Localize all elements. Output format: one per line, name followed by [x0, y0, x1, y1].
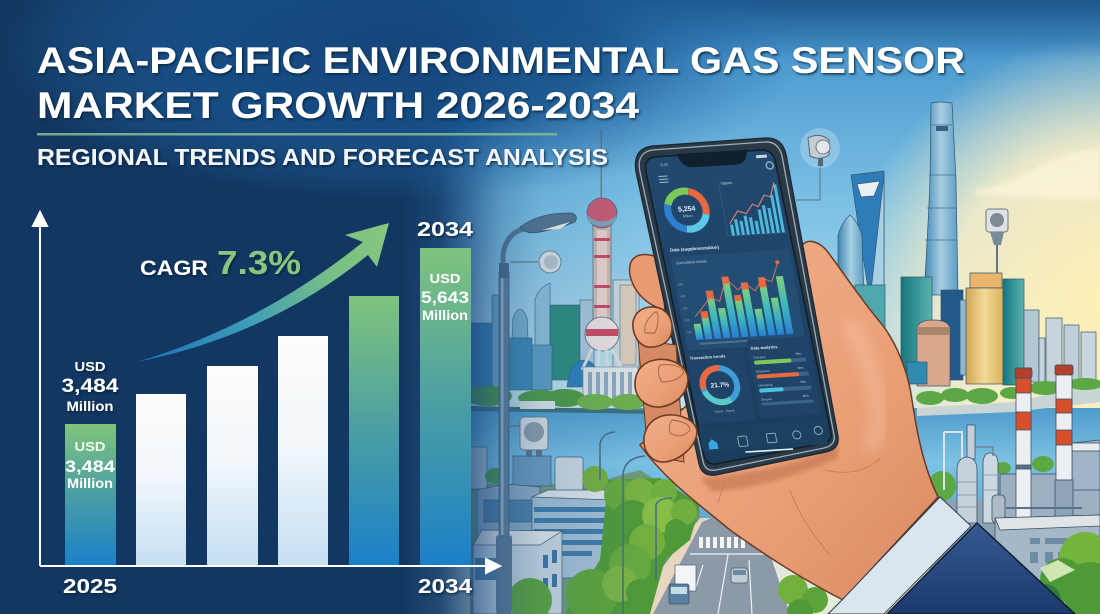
bottom-right panel: bars: Data analytics	[750, 344, 779, 351]
subtitle: REGIONAL TRENDS AND FORECAST ANALYSIS	[37, 144, 608, 170]
label above 2025 bar	[62, 359, 119, 414]
label above 2025 bar: USD	[74, 359, 106, 374]
bar 2034	[420, 248, 471, 565]
y axis	[33, 212, 47, 566]
scene: trees and road	[508, 432, 828, 614]
main chart panel: Cumulative trends	[676, 259, 707, 265]
label inside 2034 bar: Million	[422, 307, 468, 323]
title	[37, 40, 965, 126]
bar 4	[278, 336, 328, 565]
year labels	[63, 219, 474, 598]
hand: palm	[630, 241, 938, 600]
year labels: 2034	[417, 219, 474, 241]
bottom-right panel: bars: Sensors	[761, 397, 773, 402]
phone	[635, 138, 838, 475]
bar 2025	[65, 424, 116, 565]
title: MARKET GROWTH 2026-2034	[37, 85, 639, 126]
growth arrow	[137, 223, 389, 362]
label inside 2034 bar: USD	[430, 271, 460, 286]
label inside 2025 bar: USD	[74, 439, 106, 454]
label above 2025 bar: 3,484	[62, 376, 119, 397]
bottom-right panel: bars: Category	[753, 355, 766, 360]
bottom-left panel: donut	[686, 348, 756, 424]
phone screen background	[646, 150, 831, 464]
label inside 2034 bar: 5,643	[421, 288, 469, 307]
label inside 2025 bar: 3,484	[65, 457, 116, 476]
shirt cuff	[828, 497, 971, 614]
bottom-right panel: bars: 75%	[795, 352, 802, 356]
year labels: 2025	[63, 576, 117, 598]
year labels: 2034	[418, 576, 473, 598]
navy left fade	[0, 0, 660, 614]
donut gauge	[659, 185, 714, 235]
scene: truck and car	[669, 565, 748, 604]
title divider	[37, 133, 557, 136]
x axis	[40, 559, 500, 573]
label inside 2025 bar	[65, 439, 116, 491]
CAGR label	[140, 244, 301, 281]
scene: right skyline	[838, 102, 1096, 386]
label above 2025 bar: Million	[66, 398, 114, 414]
bar 5	[349, 296, 399, 565]
bottom-right panel: bars: 50%	[800, 380, 807, 384]
label inside 2025 bar: Million	[67, 475, 113, 491]
bar 3	[207, 366, 258, 565]
bar 2	[136, 394, 186, 565]
scene: street lamp with sensors	[496, 213, 576, 614]
phone body	[635, 138, 838, 475]
scene: Oriental Pearl tower	[582, 130, 638, 401]
mini chart: Values	[720, 180, 733, 186]
bottom-left panel: donut: Import · Export	[714, 408, 735, 414]
notch	[677, 150, 749, 168]
hand: fingers over phone	[633, 307, 697, 462]
settings icon	[766, 162, 774, 169]
suit sleeve	[887, 523, 1075, 614]
main chart panel: Data (supplementation)	[669, 245, 720, 253]
phone screen content	[649, 148, 828, 455]
top-left blue glow	[0, 0, 820, 210]
scene: ground	[470, 470, 1100, 614]
main chart panel: 300	[682, 306, 688, 310]
finger 2	[633, 307, 672, 347]
scene: right shore trees	[916, 378, 1100, 405]
scene: industrial plant	[928, 365, 1100, 614]
title: ASIA-PACIFIC ENVIRONMENTAL GAS SENSOR	[37, 40, 965, 81]
scene: left shore trees	[464, 386, 646, 410]
finger nails	[645, 312, 690, 436]
scene: left-bottom buildings	[470, 447, 618, 614]
main chart panel: 100	[687, 330, 692, 334]
bottom-right panel: bars: 90%	[802, 394, 809, 398]
menu icon	[658, 176, 669, 182]
bottom-left panel: donut: Transaction trends	[689, 353, 727, 361]
finger 4	[644, 415, 697, 462]
scene: river water	[470, 383, 1100, 518]
bottom-right panel: bars	[746, 336, 821, 418]
scene: left skyline	[470, 280, 639, 390]
CAGR label: CAGR	[140, 257, 208, 280]
bottom-right panel: bars: Monitoring	[758, 383, 773, 388]
navigation bar	[698, 420, 828, 455]
main chart panel: 200	[684, 318, 690, 322]
finger behind phone	[630, 255, 665, 310]
scene: tower sensor boxes	[796, 128, 1008, 273]
bottom-right panel: bars: Emissions	[756, 369, 770, 374]
bottom-left panel: donut: 21.7%	[710, 382, 730, 390]
donut gauge: 5,254	[677, 206, 696, 214]
CAGR label: 7.3%	[217, 244, 301, 281]
label inside 2034 bar	[421, 271, 469, 323]
finger 3	[635, 359, 688, 407]
bottom-right panel: bars: 80%	[797, 366, 804, 370]
main chart panel: 400	[680, 294, 686, 298]
donut gauge: Million	[683, 214, 693, 218]
main chart panel: 500	[678, 282, 684, 286]
status bar: 9:41	[660, 162, 669, 167]
main chart panel	[668, 240, 806, 351]
mini chart	[718, 177, 786, 236]
scene: right-bottom trees	[1029, 532, 1100, 614]
bar chart	[33, 212, 500, 598]
